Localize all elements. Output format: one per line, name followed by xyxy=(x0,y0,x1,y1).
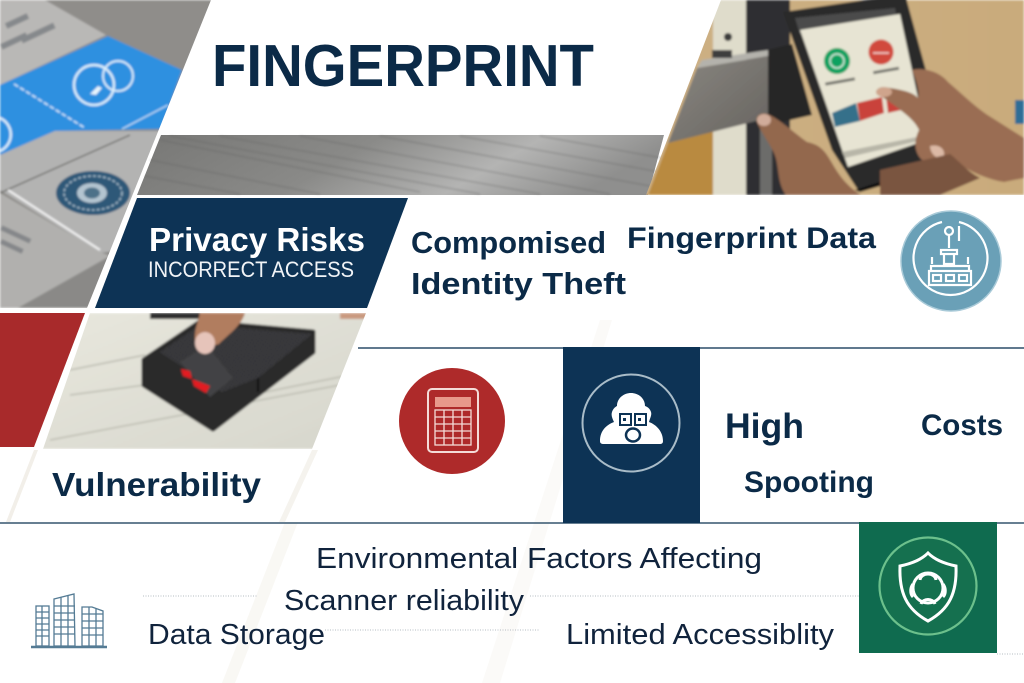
text: compromised identity theft xyxy=(411,225,626,301)
heading: privacy risks: Privacy Risks xyxy=(149,221,365,258)
text: spoofing: Spooting xyxy=(744,466,874,499)
photo: fingerprint control panels xyxy=(0,0,213,308)
brushed metal texture band xyxy=(137,135,664,195)
text: high: High xyxy=(725,407,804,446)
text: fingerprint data: Fingerprint Data xyxy=(627,222,876,255)
panel: privacy risks xyxy=(95,198,408,308)
text: limited accessibility: Limited Accessiblity xyxy=(566,619,835,651)
text: compromised identity theft: Compomised xyxy=(411,225,606,260)
photo: hands using fingerprint tablet xyxy=(640,0,1024,195)
text: scanner reliability: Scanner reliability xyxy=(284,585,525,617)
text: compromised identity theft: Identity Theft xyxy=(411,266,626,301)
subheading: incorrect access: INCORRECT ACCESS xyxy=(148,257,354,282)
text: environmental factors: Environmental Factors Affecting xyxy=(316,543,762,575)
icon: masked figure xyxy=(582,374,680,472)
title: FINGERPRINT xyxy=(212,33,594,99)
red swatch xyxy=(0,313,85,447)
icon: buildings xyxy=(31,594,107,647)
panel: navy spoofing icon xyxy=(563,347,700,523)
text: data storage: Data Storage xyxy=(148,619,325,651)
photo: fingerprint scanner xyxy=(40,313,370,449)
icon: red calculator xyxy=(399,368,505,474)
icon: right hand xyxy=(876,69,1024,182)
icon: monument in blue circle xyxy=(901,211,1001,311)
text: costs: Costs xyxy=(921,409,1003,442)
icon: left hand xyxy=(757,113,861,195)
text: vulnerability: Vulnerability xyxy=(52,466,262,503)
panel: green shield icon xyxy=(859,522,997,653)
